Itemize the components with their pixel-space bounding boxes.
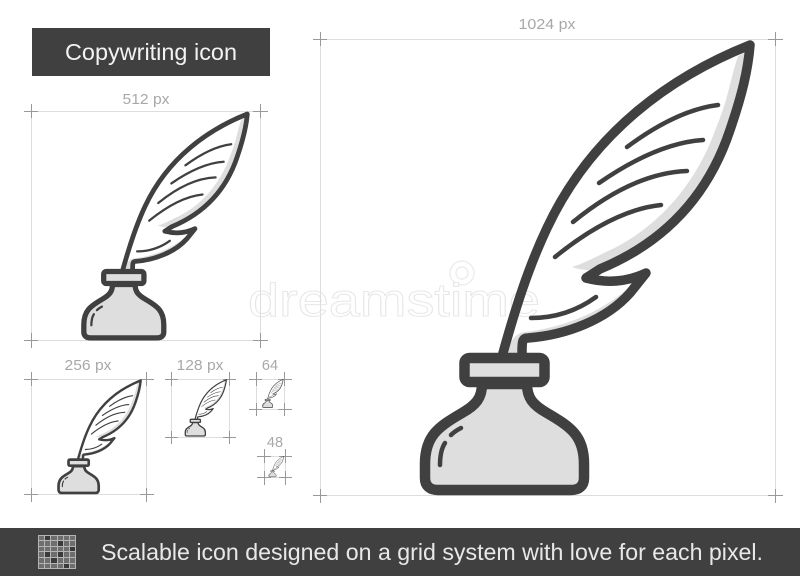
icon: pixel grid <box>38 535 76 569</box>
icon: quill and inkwell, 128 <box>185 380 226 436</box>
icon: quill and inkwell, 512 <box>84 114 247 338</box>
panel: 1024 px icon: 1024 px <box>518 17 576 33</box>
panel: 48 px icon <box>257 435 292 485</box>
panel: 48 px icon: 48 <box>267 435 283 451</box>
panel: 256 px icon: 256 px <box>64 358 112 374</box>
icon: quill and inkwell, 48 <box>269 456 284 477</box>
panel: 512 px icon: 512 px <box>122 92 170 108</box>
watermark: dreamstime <box>248 274 540 326</box>
title banner: Copywriting icon <box>65 39 237 65</box>
icon: quill and inkwell, 64 <box>263 379 283 408</box>
panel: 128 px icon: 128 px <box>176 358 224 374</box>
footer bar <box>0 528 800 576</box>
panel: 256 px icon <box>24 358 154 502</box>
icon: quill and inkwell, 256 <box>59 381 141 493</box>
panel: 512 px icon <box>24 92 268 348</box>
watermark <box>248 261 540 326</box>
title banner <box>32 28 270 76</box>
icon: quill and inkwell, large <box>425 45 750 490</box>
panel: 64 px icon <box>249 358 292 416</box>
footer text: Scalable icon designed on a grid system with love for each pixel. <box>101 539 763 565</box>
panel: 64 px icon: 64 <box>262 358 278 374</box>
panel: 128 px icon <box>165 358 236 444</box>
